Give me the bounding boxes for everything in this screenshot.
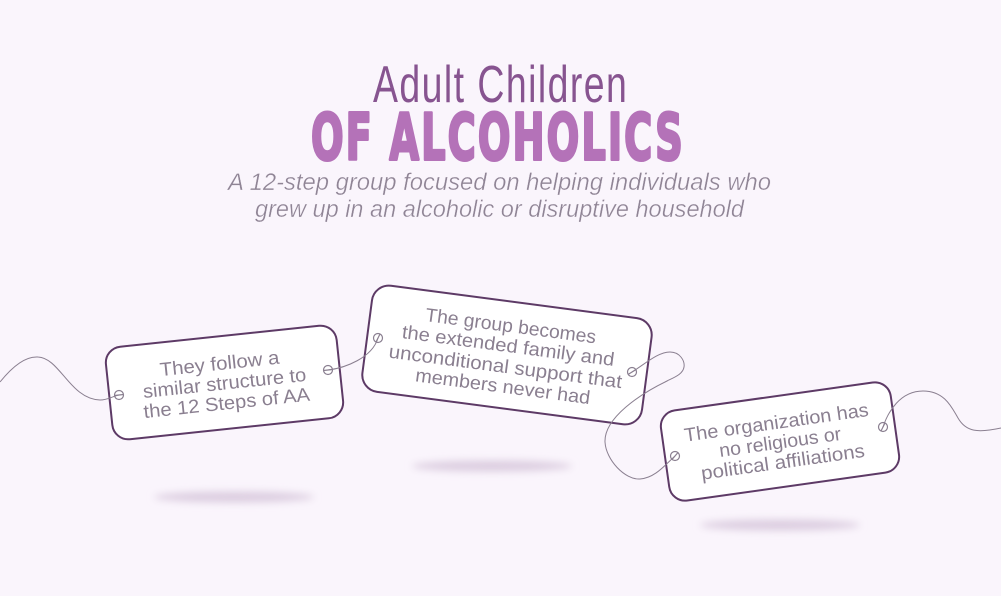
hole: tag 3 right: [878, 422, 888, 432]
hole: tag 2 left: [374, 334, 382, 342]
tag 3: [659, 380, 901, 503]
tag 3: The organization has: [683, 400, 870, 447]
shadow: tag 2: [412, 460, 572, 472]
subtitle: [226, 169, 771, 223]
tag 1: They follow a: [159, 348, 281, 381]
shadow: tag 1: [154, 492, 314, 502]
hole: tag 1 left: [114, 390, 124, 400]
subtitle: A 12-step group focused on helping individuals who: [226, 169, 771, 196]
string: left to tag 1: [0, 357, 119, 400]
tag 1: [104, 324, 345, 441]
title line 1: Adult Children: [373, 55, 628, 113]
tag 1: the 12 Steps of AA: [143, 385, 311, 423]
string: tag 3 to right edge: [883, 391, 1001, 431]
hole: tag 3 left: [670, 452, 680, 460]
tag 2: members never had: [414, 365, 591, 409]
hole: tag 2 right: [628, 368, 636, 376]
tag 2: [360, 284, 654, 426]
tag 1: similar structure to: [142, 365, 307, 403]
tag 2: The group becomes: [424, 305, 597, 348]
string: tag 2 to tag 3: [605, 352, 684, 479]
hole: tag 1 right: [324, 366, 332, 374]
tag 3: political affiliations: [700, 441, 866, 485]
tag 2: unconditional support that: [388, 342, 624, 393]
title line 2: OF ALCOHOLICS: [311, 101, 685, 175]
tag 3: no religious or: [718, 424, 843, 462]
tag 2: the extended family and: [401, 322, 616, 371]
shadow: tag 3: [700, 520, 860, 530]
subtitle: grew up in an alcoholic or disruptive household: [255, 196, 745, 223]
string: tag 1 to tag 2: [328, 338, 378, 370]
